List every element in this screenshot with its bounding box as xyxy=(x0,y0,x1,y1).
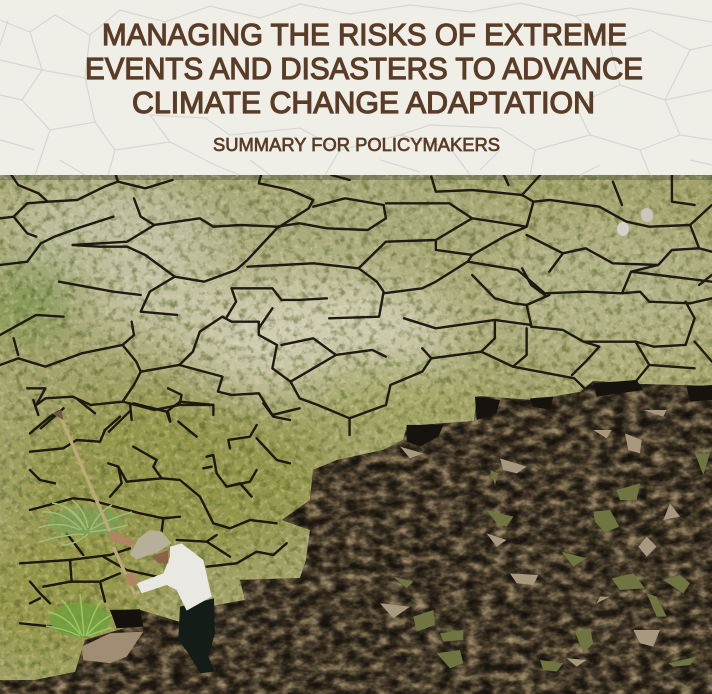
shirt xyxy=(137,543,212,611)
subtitle: SUMMARY FOR POLICYMAKERS xyxy=(213,135,500,155)
photo: cracked dry ground with farmer xyxy=(0,175,712,694)
farmer with hoe xyxy=(52,410,215,673)
rock shadows, green clods and tan stones xyxy=(380,380,712,672)
plastic containers on ground xyxy=(617,208,653,236)
title line 2: EVENTS AND DISASTERS TO ADVANCE xyxy=(85,52,643,86)
hoe pole xyxy=(58,412,135,595)
cracks in upper ground xyxy=(0,175,712,435)
header band xyxy=(0,0,712,175)
broken rocky soil xyxy=(0,375,712,694)
clods near feet xyxy=(82,632,143,663)
face xyxy=(152,550,168,563)
grass tuft upper xyxy=(38,500,132,545)
dry ground colour field xyxy=(0,175,712,694)
grass tuft lower xyxy=(46,594,112,637)
arms xyxy=(108,532,138,587)
title line 3: CLIMATE CHANGE ADAPTATION xyxy=(132,86,595,120)
title line 1: MANAGING THE RISKS OF EXTREME xyxy=(102,18,627,52)
cracks in lower ground xyxy=(20,400,290,633)
straw hat xyxy=(130,530,172,559)
legs xyxy=(178,598,215,673)
title block xyxy=(85,18,643,155)
shadow at feet xyxy=(110,609,143,628)
hoe blade xyxy=(52,410,63,420)
